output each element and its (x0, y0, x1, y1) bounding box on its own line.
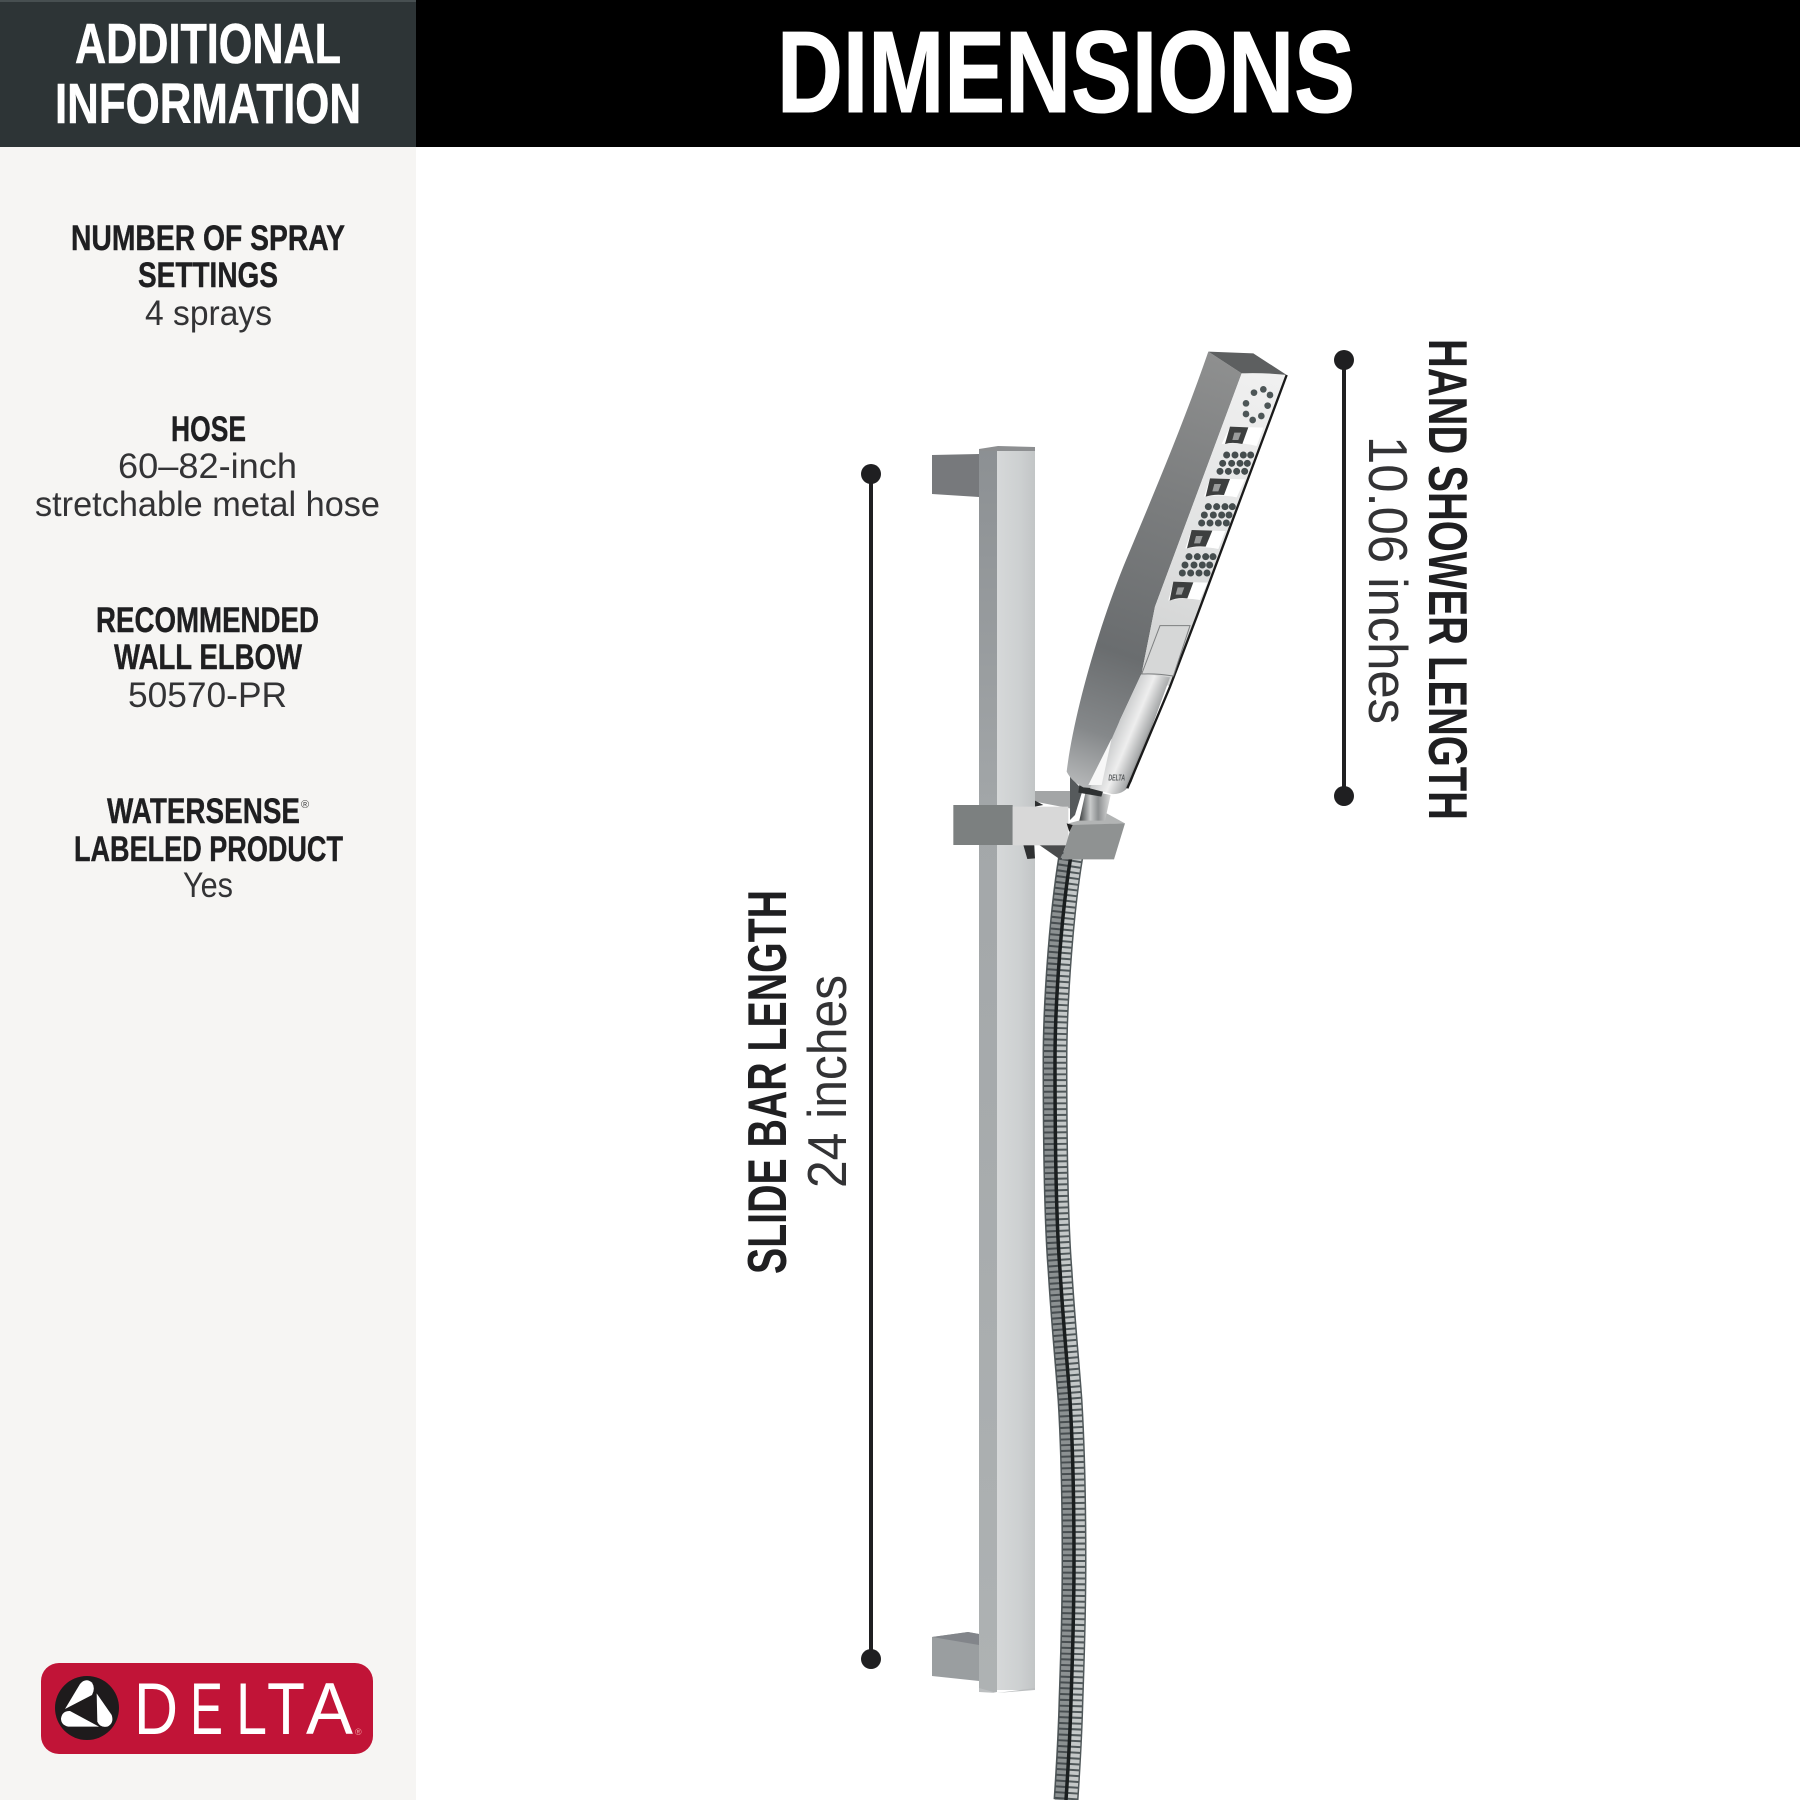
hand shower neck (1070, 777, 1111, 821)
spec: number of spray settings: SETTINGS (138, 256, 278, 295)
Delta logo: T (267, 1669, 305, 1750)
dimension: slide bar length (736, 464, 881, 1669)
spec: hose (35, 410, 380, 524)
spec: recommended wall elbow: 50570-PR (128, 676, 287, 715)
Delta logo: L (236, 1669, 267, 1750)
dimension: slide bar length: 24 inches (796, 975, 858, 1188)
Delta logo: D (134, 1669, 178, 1750)
product: sliding bracket and holder (953, 791, 1125, 859)
spec: recommended wall elbow: WALL ELBOW (114, 638, 302, 677)
Delta logo: ® (355, 1727, 362, 1737)
panel: additional information sidebar (0, 0, 416, 1800)
spec: hose: HOSE (171, 410, 246, 449)
spec: hose: stretchable metal hose (35, 485, 380, 524)
product: slide bar (932, 446, 1035, 1693)
spec: watersense labeled product: WATERSENSE (107, 792, 300, 831)
spec: recommended wall elbow: RECOMMENDED (96, 601, 319, 640)
dimension: hand shower length: 10.06 inches (1357, 436, 1419, 724)
spray nozzle ring (1243, 386, 1273, 423)
nozzle grids (1179, 451, 1254, 576)
product: hose (1049, 850, 1074, 1800)
Delta logo: A (306, 1669, 353, 1750)
brand mark on handle: DELTA (1108, 774, 1125, 783)
dimension: hand shower length (1334, 339, 1479, 820)
title bar: dimensions (416, 0, 1800, 147)
product: hand shower (1067, 352, 1287, 821)
sidebar heading: INFORMATION (55, 72, 361, 136)
spec: watersense labeled product: Yes (183, 866, 233, 905)
title bar: dimensions: DIMENSIONS (777, 7, 1355, 137)
dimension: hand shower length: HAND SHOWER LENGTH (1417, 339, 1479, 820)
hand shower side face (1067, 352, 1242, 788)
spec: recommended wall elbow (96, 601, 319, 715)
hand shower front face (1088, 373, 1287, 794)
spec: number of spray settings (71, 219, 345, 333)
Delta logo: E (190, 1669, 223, 1750)
spec: watersense labeled product: ® (301, 799, 309, 811)
dimension: slide bar length: SLIDE BAR LENGTH (736, 890, 798, 1274)
hand shower top cap (1208, 352, 1287, 375)
spec: number of spray settings: NUMBER OF SPRAY (71, 219, 345, 258)
sidebar heading: ADDITIONAL (75, 12, 341, 76)
spec: watersense labeled product: LABELED PRODUCT (74, 830, 343, 869)
spray windows (1168, 427, 1263, 601)
Delta logo (41, 1663, 373, 1754)
spec: number of spray settings: 4 sprays (145, 294, 272, 333)
spec: watersense labeled product (74, 792, 343, 905)
spec: hose: 60–82-inch (118, 447, 297, 486)
spray button (1142, 626, 1190, 676)
sidebar heading (0, 0, 416, 147)
